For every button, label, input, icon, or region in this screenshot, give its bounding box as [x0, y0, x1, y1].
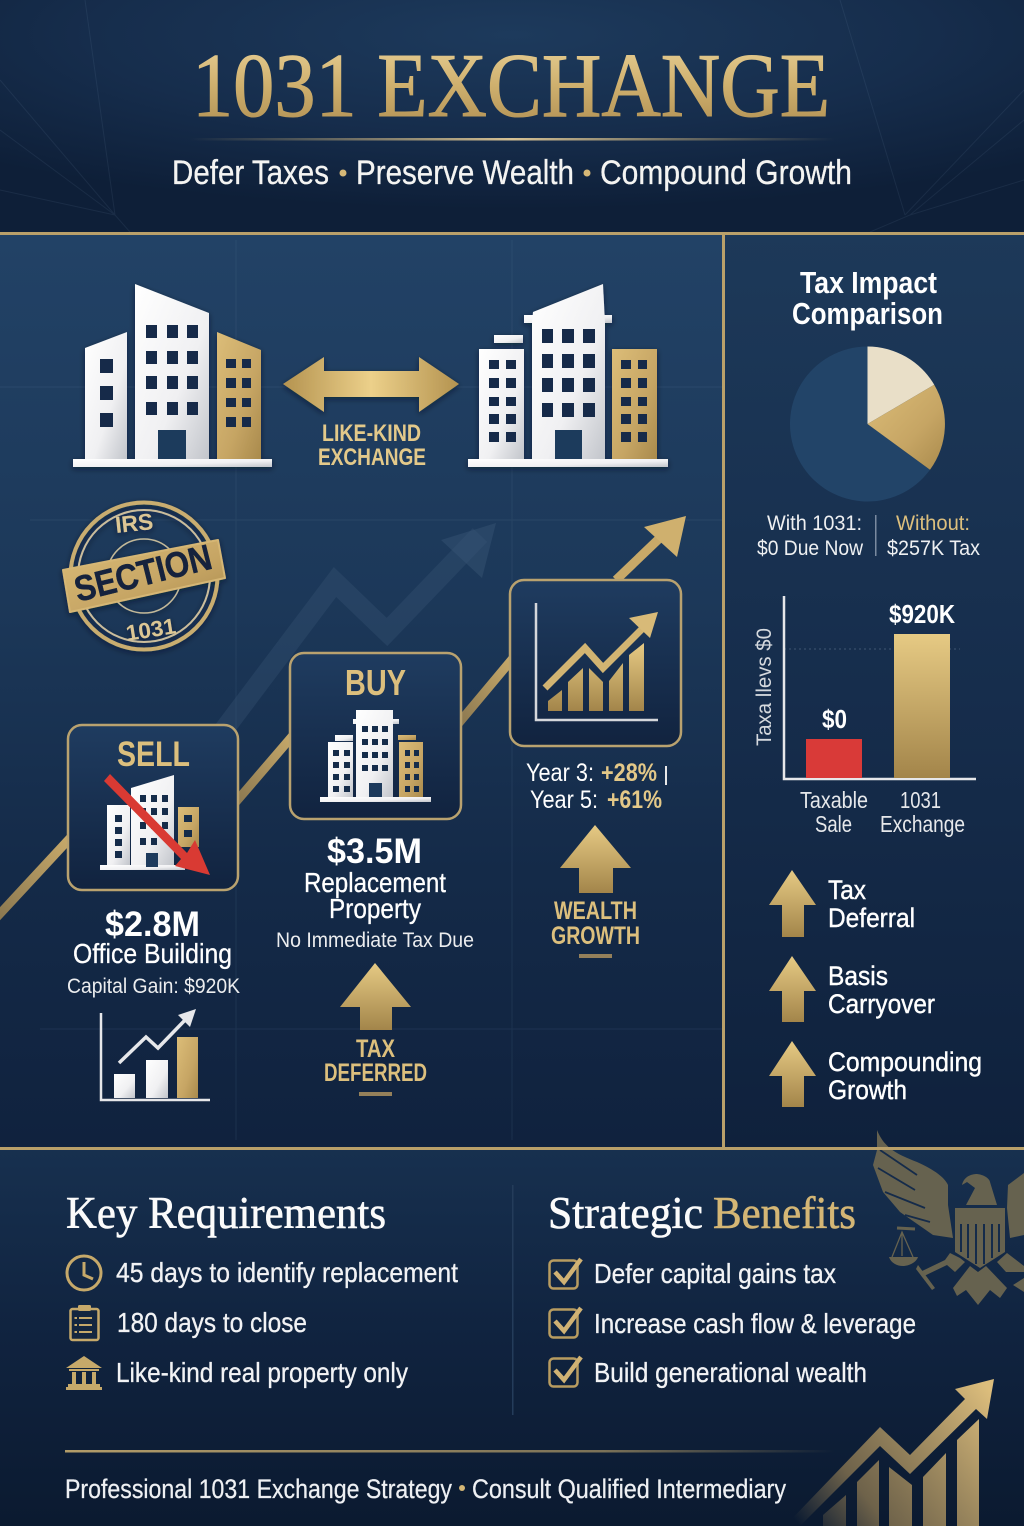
- stamp: IRS section 1031: IRS: [114, 508, 154, 538]
- footer background: [0, 1148, 1024, 1526]
- sell figures: $2.8M: [105, 905, 200, 944]
- strategic benefits heading: Strategic: [548, 1188, 703, 1238]
- side panel heading: Tax Impact: [800, 265, 937, 300]
- wealth growth label: [551, 897, 640, 958]
- strategic benefits heading: [548, 1188, 856, 1238]
- buy figures: Replacement: [304, 867, 446, 898]
- year-over-year growth figures: +28%: [601, 759, 657, 787]
- bar value labels: $920K: [889, 599, 955, 629]
- year-over-year growth figures: Year 3:: [526, 759, 594, 787]
- title: 1031 EXCHANGE: [192, 35, 830, 136]
- x axis labels: [800, 787, 965, 837]
- text: defer capital gains tax: Defer capital gains tax: [594, 1258, 836, 1289]
- icon: checkbox: [550, 1357, 581, 1386]
- text: like-kind property: Like-kind real property only: [116, 1357, 408, 1388]
- gold growth path: [0, 516, 686, 918]
- text: basis carryover: [828, 961, 935, 1019]
- sell label: SELL: [117, 735, 190, 774]
- icon: clock: [67, 1256, 101, 1290]
- bar value labels: $0: [822, 704, 847, 734]
- tax deferred label: TAX: [356, 1035, 395, 1063]
- bar value labels: [822, 599, 955, 734]
- x axis labels: Taxable: [800, 787, 868, 813]
- sell figures: Capital Gain: $920K: [67, 975, 240, 998]
- text: compounding growth: [828, 1047, 982, 1105]
- double arrow: [283, 357, 459, 412]
- icon: checkbox: [550, 1308, 581, 1338]
- year-over-year growth figures: Year 5:: [530, 786, 598, 814]
- text: generational wealth: Build generational wealth: [594, 1357, 867, 1388]
- buy figures: No Immediate Tax Due: [276, 929, 474, 952]
- requirement: 180 days: [70, 1305, 307, 1340]
- icon: small growth chart: [101, 1009, 210, 1100]
- sell figures: [67, 905, 240, 998]
- text: 180 days: 180 days to close: [117, 1307, 307, 1338]
- y axis label: Taxa llevs $0: [753, 628, 776, 746]
- tax bar chart: [753, 596, 976, 837]
- buy figures: [276, 832, 474, 952]
- bar: taxable sale: [806, 739, 862, 778]
- pie legend: Without:: [896, 512, 970, 535]
- icon: corner growth chart: [785, 1379, 994, 1526]
- stamp: IRS section 1031: 1031: [124, 613, 177, 646]
- like-kind exchange label: LIKE-KIND: [322, 420, 421, 447]
- like-kind property right: building icon: [468, 284, 668, 467]
- like-kind exchange label: EXCHANGE: [318, 444, 426, 471]
- year-over-year growth figures: [526, 759, 667, 814]
- buy figures: Property: [329, 893, 421, 924]
- year-over-year growth figures: +61%: [607, 786, 662, 814]
- pie legend: $0 Due Now: [757, 537, 864, 560]
- pie legend: With 1031:: [767, 512, 862, 535]
- step card: growth chart: [510, 580, 681, 746]
- pie legend: [757, 512, 980, 560]
- requirement: 45 days: [67, 1256, 458, 1290]
- icon: up arrow, tax deferral: [769, 870, 816, 937]
- tax deferred label: DEFERRED: [324, 1059, 427, 1087]
- sell figures: Office Building: [73, 938, 232, 969]
- text: cash flow and leverage: Increase cash flow & leverage: [594, 1308, 916, 1339]
- icon: clipboard: [70, 1305, 98, 1340]
- buy label: BUY: [345, 662, 406, 703]
- icon: eagle seal watermark: [873, 1130, 1024, 1305]
- icon: tax deferred up arrow: [340, 963, 411, 1030]
- faint background trend arrow: [220, 523, 496, 735]
- strategic benefits heading: Benefits: [713, 1188, 856, 1238]
- like-kind exchange label: [318, 420, 426, 471]
- subtitle: Preserve Wealth: [356, 154, 574, 192]
- text: basis carryover: Carryover: [828, 989, 935, 1019]
- subtitle: Defer Taxes: [172, 154, 329, 192]
- icon: up arrow, compounding growth: [769, 1041, 816, 1107]
- text: 45 days: 45 days to identify replacement: [116, 1257, 458, 1288]
- footer note: Consult Qualified Intermediary: [472, 1474, 786, 1504]
- like-kind property left: building icon: [73, 284, 272, 467]
- main panel background: [0, 233, 723, 1148]
- x axis labels: Sale: [815, 811, 852, 837]
- icon: wealth growth up arrow: [560, 825, 631, 893]
- pie chart: [790, 346, 945, 502]
- footer note: [65, 1474, 786, 1504]
- icon: building with falling arrow: [100, 774, 210, 875]
- side panel background: [723, 233, 1024, 1148]
- wealth growth label: WEALTH: [554, 897, 637, 925]
- x axis labels: 1031: [900, 787, 941, 813]
- step card: buy: [290, 653, 461, 819]
- stamp: IRS section 1031: [63, 502, 225, 650]
- requirement: like-kind property: [66, 1356, 408, 1390]
- side panel heading: Comparison: [792, 296, 943, 331]
- header background: [0, 0, 1024, 233]
- subtitle: Compound Growth: [600, 154, 852, 192]
- benefit: generational wealth: [550, 1357, 867, 1388]
- buy figures: $3.5M: [327, 832, 422, 871]
- bar: 1031 exchange: [894, 634, 950, 778]
- benefit: defer capital gains tax: [550, 1258, 836, 1289]
- subtitle: [172, 154, 852, 192]
- text: basis carryover: Basis: [828, 961, 888, 991]
- benefit arrows list: [769, 870, 982, 1107]
- step card: sell: [68, 725, 238, 890]
- x axis labels: Exchange: [880, 811, 965, 837]
- pie legend: $257K Tax: [887, 537, 980, 560]
- text: compounding growth: Compounding: [828, 1047, 982, 1077]
- key requirements heading: Key Requirements: [66, 1188, 386, 1238]
- text: tax deferral: Tax: [828, 875, 866, 905]
- icon: replacement building: [320, 710, 431, 802]
- text: compounding growth: Growth: [828, 1075, 907, 1105]
- side panel heading: [792, 265, 943, 331]
- icon: up arrow, basis carryover: [769, 956, 816, 1022]
- icon: bank: [66, 1356, 102, 1390]
- tax deferred label: [324, 1035, 427, 1096]
- wealth growth label: GROWTH: [551, 922, 640, 950]
- icon: checkbox: [550, 1259, 581, 1288]
- footer note: Professional 1031 Exchange Strategy: [65, 1474, 452, 1504]
- benefit: cash flow and leverage: [550, 1308, 916, 1339]
- stamp: IRS section 1031: SECTION: [70, 536, 216, 610]
- text: tax deferral: [828, 875, 915, 933]
- text: tax deferral: Deferral: [828, 903, 915, 933]
